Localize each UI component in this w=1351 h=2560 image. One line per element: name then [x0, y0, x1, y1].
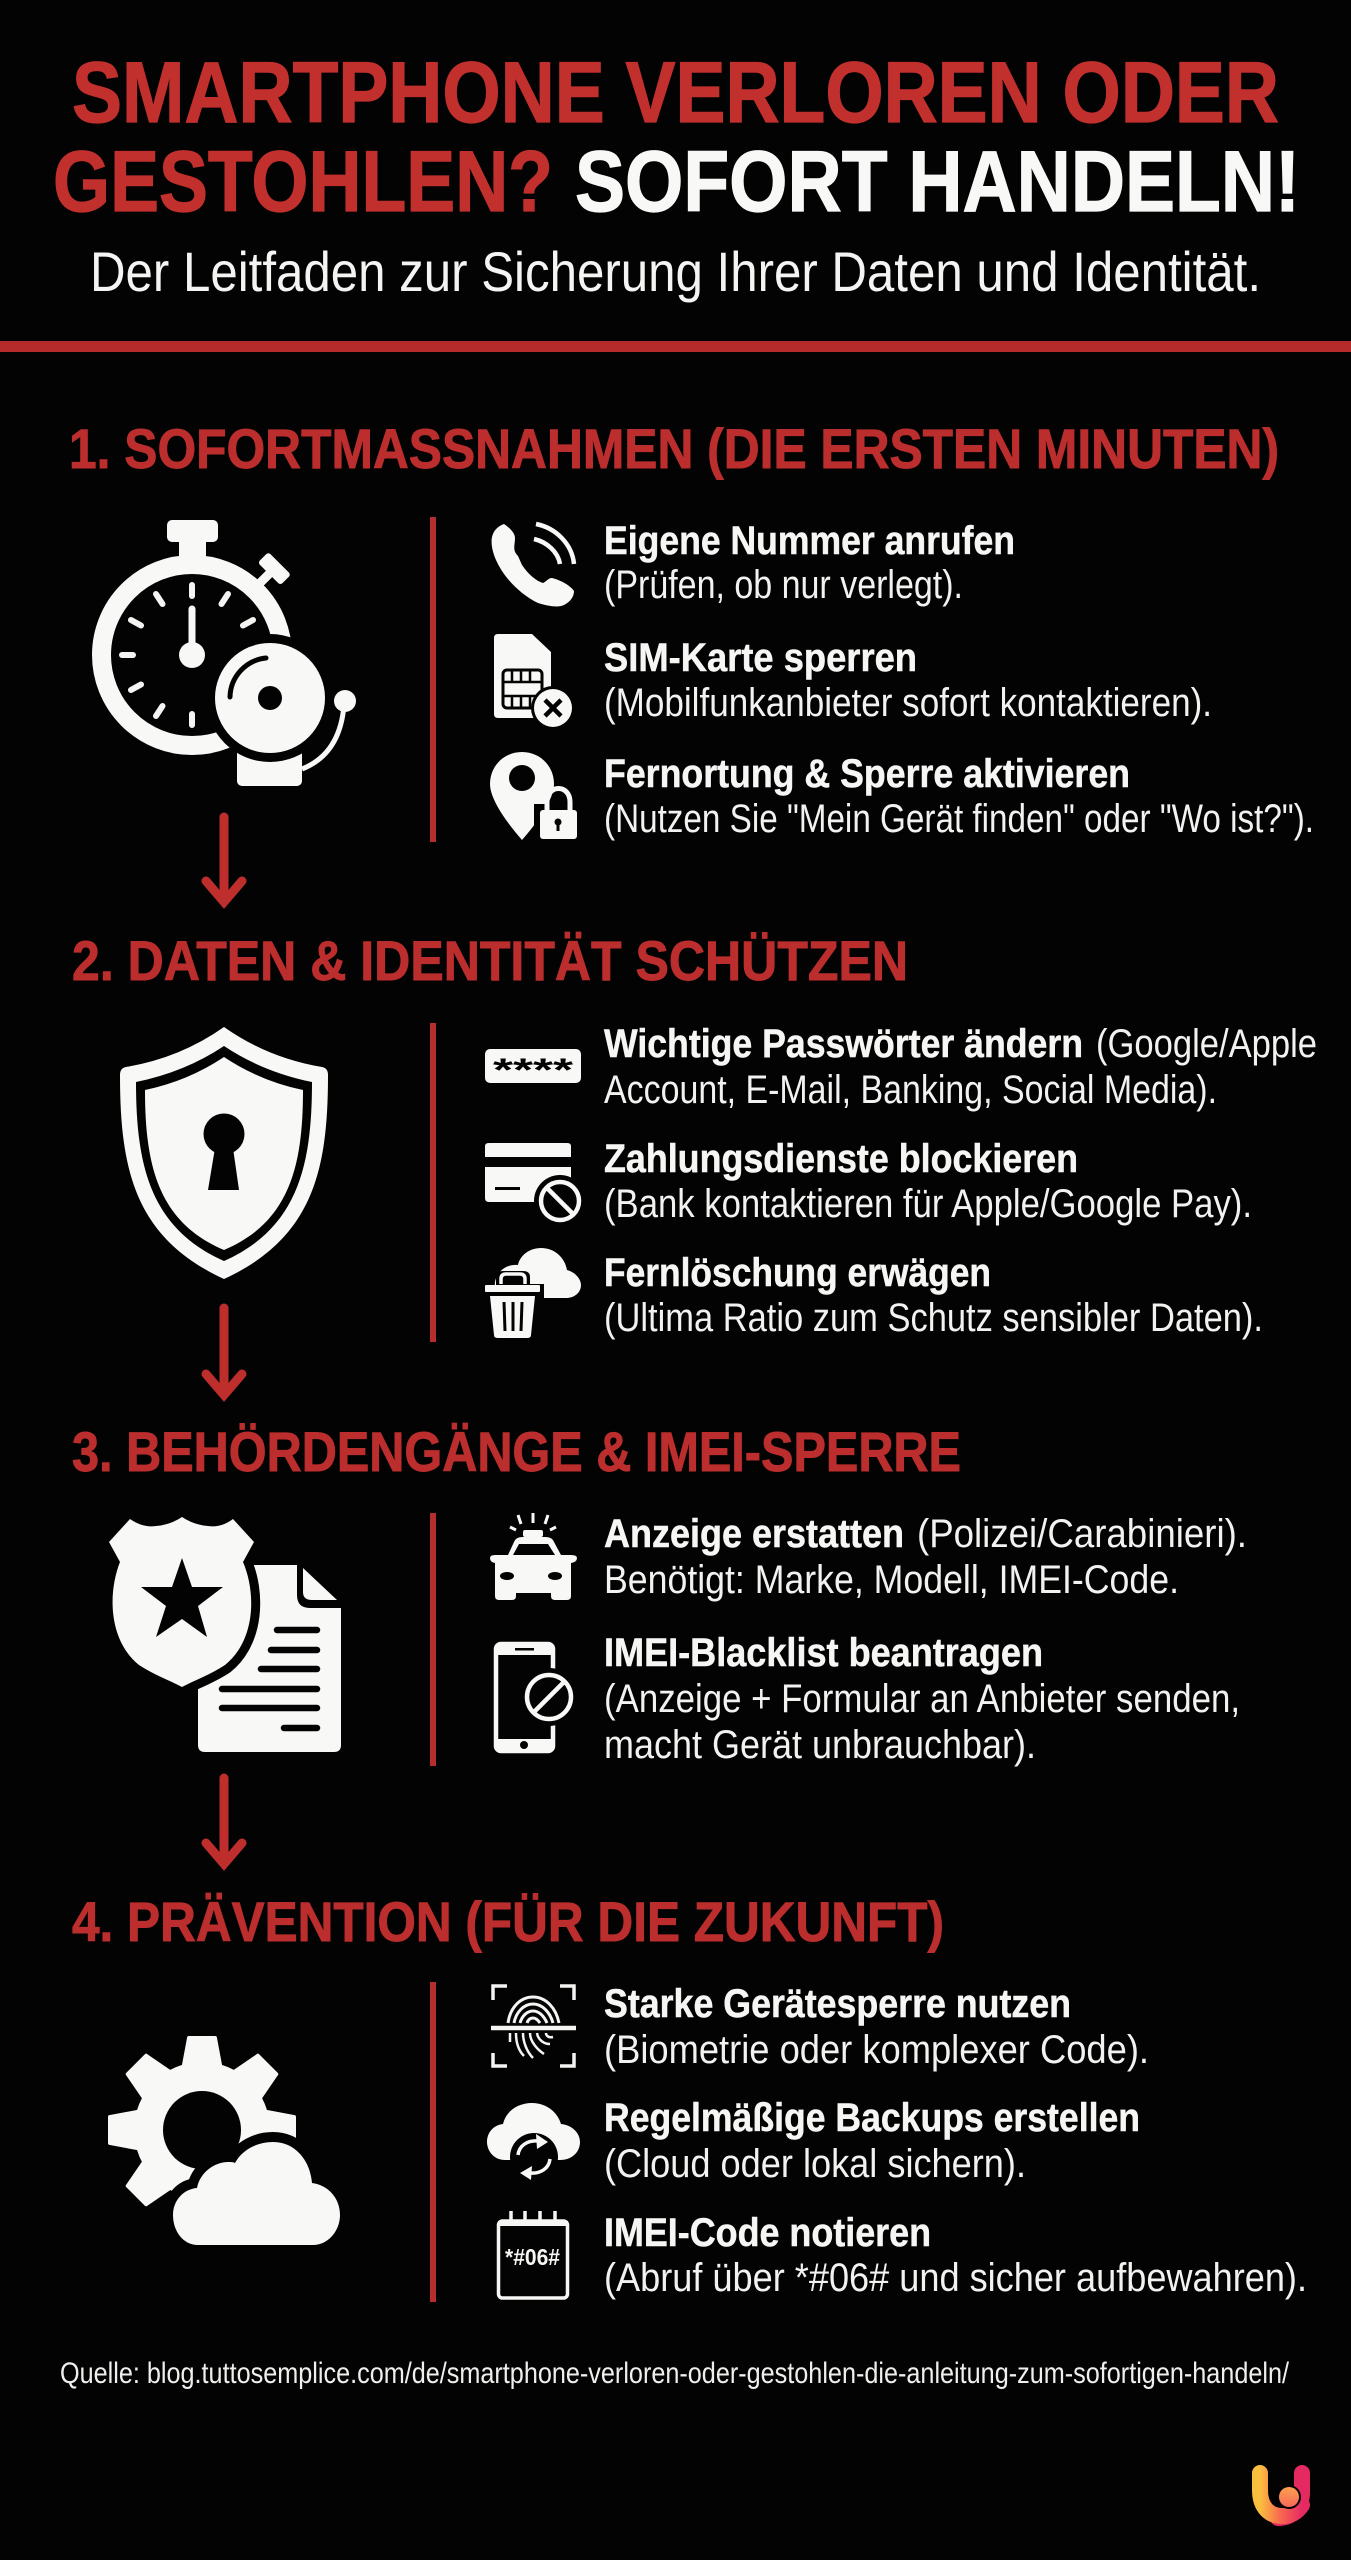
- icon: gear and cloud: [108, 2036, 340, 2245]
- arrow 3 to 4: [206, 1778, 242, 1864]
- text: Anzeige erstatten: Anzeige erstatten: [604, 1512, 904, 1556]
- icon: fingerprint scanner: [491, 1986, 576, 2066]
- text: Ultima Ratio: (Ultima Ratio zum Schutz sensibler Daten).: [604, 1296, 1263, 1340]
- text: Fernlöschung erwägen: Fernlöschung erwägen: [604, 1251, 991, 1295]
- text: Account: Account, E-Mail, Banking, Social Media).: [604, 1068, 1217, 1112]
- icon: police badge and document: [109, 1517, 341, 1752]
- icon: stopwatch and alarm bell: [102, 520, 356, 786]
- text: Mobilfunkanbieter: (Mobilfunkanbieter sofort kontaktieren).: [604, 681, 1212, 725]
- icon: SIM card blocked: [494, 634, 575, 730]
- item: Passwörter: [485, 1022, 1317, 1112]
- heading 2: 2. DATEN & IDENTITÄT SCHÜTZEN: [72, 929, 908, 992]
- panel: section 4 Prävention: [72, 1890, 1307, 2302]
- header block: [53, 45, 1300, 303]
- vertical divider 1: [430, 517, 436, 842]
- vertical divider 3: [430, 1513, 436, 1766]
- text: Bank kontaktieren: (Bank kontaktieren für Apple/Google Pay).: [604, 1182, 1252, 1226]
- icon: notepad with code: *#06#: [505, 2244, 560, 2270]
- icon: cloud sync: [487, 2103, 580, 2181]
- text: SIM-Karte sperren: SIM-Karte sperren: [604, 636, 917, 680]
- arrow 2 to 3: [206, 1308, 242, 1395]
- icon: cloud and trash: [480, 1248, 581, 1342]
- item: Backups: [487, 2096, 1140, 2186]
- item: IMEI-Blacklist: [496, 1631, 1240, 1767]
- text: Google/Apple: (Google/Apple: [1096, 1022, 1317, 1066]
- text: IMEI-Code notieren: IMEI-Code notieren: [604, 2211, 931, 2255]
- arrow 1 to 2: [206, 817, 242, 902]
- icon: card blocked: [485, 1143, 586, 1227]
- item: Gerätesperre: [491, 1982, 1149, 2072]
- text: Prüfen: (Prüfen, ob nur verlegt).: [604, 563, 963, 607]
- item: SIM-Karte sperren: [494, 634, 1212, 730]
- icon: shield with keyhole: [120, 1027, 328, 1279]
- heading 3: 3. BEHÖRDENGÄNGE & IMEI-SPERRE: [72, 1420, 961, 1483]
- text: Polizei/Carabinieri: (Polizei/Carabinieri).: [917, 1512, 1247, 1556]
- text: Eigene Nummer anrufen: Eigene Nummer anrufen: [604, 519, 1015, 563]
- panel: section 1 Sofortmassnahmen: [69, 417, 1314, 842]
- panel: section 2 Daten und Identität: [72, 929, 1317, 1342]
- text: Fernortung & Sperre aktivieren: Fernortung & Sperre aktivieren: [604, 752, 1130, 796]
- item: Zahlungsdienste: [485, 1137, 1252, 1227]
- icon: location pin with lock: [490, 752, 580, 842]
- panel: section 3 Behördengänge: [72, 1420, 1247, 1767]
- text: Benötigt: Benötigt: Marke, Modell, IMEI-Code.: [604, 1558, 1179, 1602]
- title line 2 red part: GESTOHLEN?: [53, 134, 553, 230]
- item: Fernlöschung: [480, 1248, 1263, 1342]
- text: IMEI-Blacklist beantragen: IMEI-Blacklist beantragen: [604, 1631, 1043, 1675]
- header divider bar: [0, 341, 1351, 352]
- heading 4: 4. PRÄVENTION (FÜR DIE ZUKUNFT): [72, 1890, 944, 1953]
- icon: phone blocked: [496, 1644, 578, 1751]
- icon: password field: [485, 1049, 581, 1088]
- icon: phone ringing: [492, 524, 574, 606]
- item: IMEI-Code: [498, 2211, 1307, 2300]
- icon: password field: ****: [493, 1052, 574, 1088]
- text: Zahlungsdienste blockieren: Zahlungsdienste blockieren: [604, 1137, 1078, 1181]
- logo: [1260, 2473, 1302, 2518]
- item: Fernortung & Sperre: [490, 752, 1314, 842]
- text: Cloud oder lokal: (Cloud oder lokal sichern).: [604, 2142, 1026, 2186]
- text: Regelmäßige Backups erstellen: Regelmäßige Backups erstellen: [604, 2096, 1140, 2140]
- item: Eigene Nummer anrufen: [492, 519, 1015, 607]
- text: Starke Gerätesperre nutzen: Starke Gerätesperre nutzen: [604, 1982, 1071, 2026]
- vertical divider 4: [430, 1982, 436, 2302]
- text: Biometrie: (Biometrie oder komplexer Code).: [604, 2028, 1149, 2072]
- icon: police car: [490, 1513, 577, 1600]
- text: Wichtige Passwörter ändern: Wichtige Passwörter ändern: [604, 1022, 1083, 1066]
- vertical divider 2: [430, 1023, 436, 1342]
- item: Anzeige erstatten: [490, 1512, 1247, 1602]
- text: macht Gerät: macht Gerät unbrauchbar).: [604, 1723, 1036, 1767]
- icon: notepad with code: [498, 2211, 568, 2298]
- text: Anzeige + Formular: (Anzeige + Formular an Anbieter senden,: [604, 1677, 1240, 1721]
